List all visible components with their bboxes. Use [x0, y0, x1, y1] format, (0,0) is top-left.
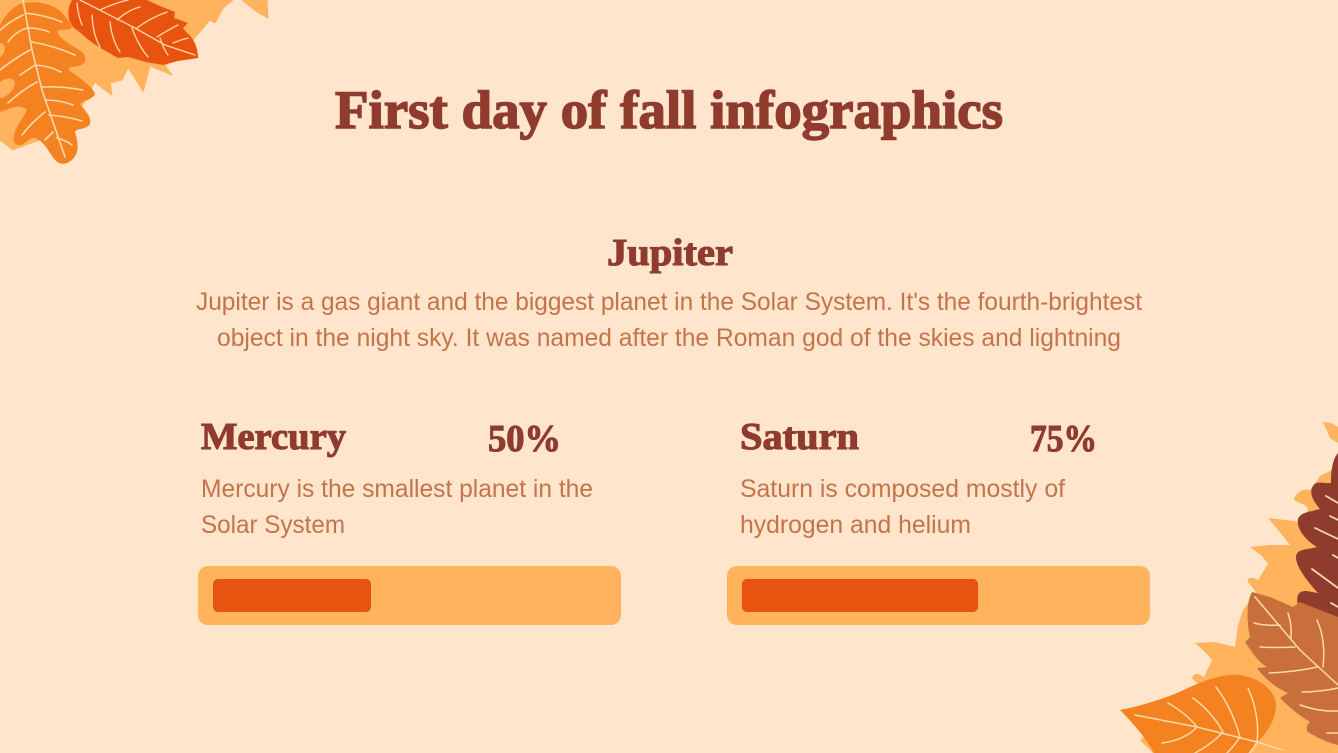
- decoration: bottom-right leaf cluster: [1120, 422, 1338, 753]
- text: Saturn description: hydrogen and helium: [740, 511, 971, 539]
- icon: red-orange leaf: [68, 0, 198, 65]
- text: Jupiter description: [196, 288, 1142, 352]
- icon: pale backing leaves: [0, 0, 268, 150]
- progress bar: Saturn: [727, 566, 1150, 625]
- value: Saturn 75%: 75%: [1030, 418, 1097, 460]
- icon: pale backing leaves: [1140, 422, 1338, 753]
- text: Mercury description: Mercury is the smallest planet in the: [201, 475, 593, 503]
- decoration: top-left leaf cluster: [0, 0, 268, 164]
- text: Saturn description: Saturn is composed mostly of: [740, 475, 1065, 503]
- text: Mercury description: Solar System: [201, 511, 345, 539]
- intro block: Jupiter: [196, 232, 1142, 352]
- value: Mercury 50%: 50%: [488, 418, 561, 460]
- text: Mercury description: [201, 475, 593, 539]
- progress bar: Mercury: [198, 566, 621, 625]
- panel: Saturn: [727, 416, 1150, 625]
- heading: Jupiter: Jupiter: [607, 232, 733, 274]
- heading: Saturn: Saturn: [740, 416, 859, 458]
- icon: orange oak leaf: [0, 0, 95, 164]
- text: Saturn description: [740, 475, 1065, 539]
- icon: maroon oak leaf: [1296, 453, 1338, 640]
- heading: Mercury: Mercury: [201, 416, 346, 458]
- icon: brown leaf: [1245, 592, 1338, 745]
- panel: Mercury: [198, 416, 621, 625]
- text: Jupiter description: object in the night sky. It was named after the Roman god of the skies and lightning: [217, 324, 1121, 352]
- icon: orange leaf: [1120, 675, 1283, 753]
- title: First day of fall infographics: [335, 80, 1003, 140]
- text: Jupiter description: Jupiter is a gas giant and the biggest planet in the Solar System. It's the fourth-brightest: [196, 288, 1142, 316]
